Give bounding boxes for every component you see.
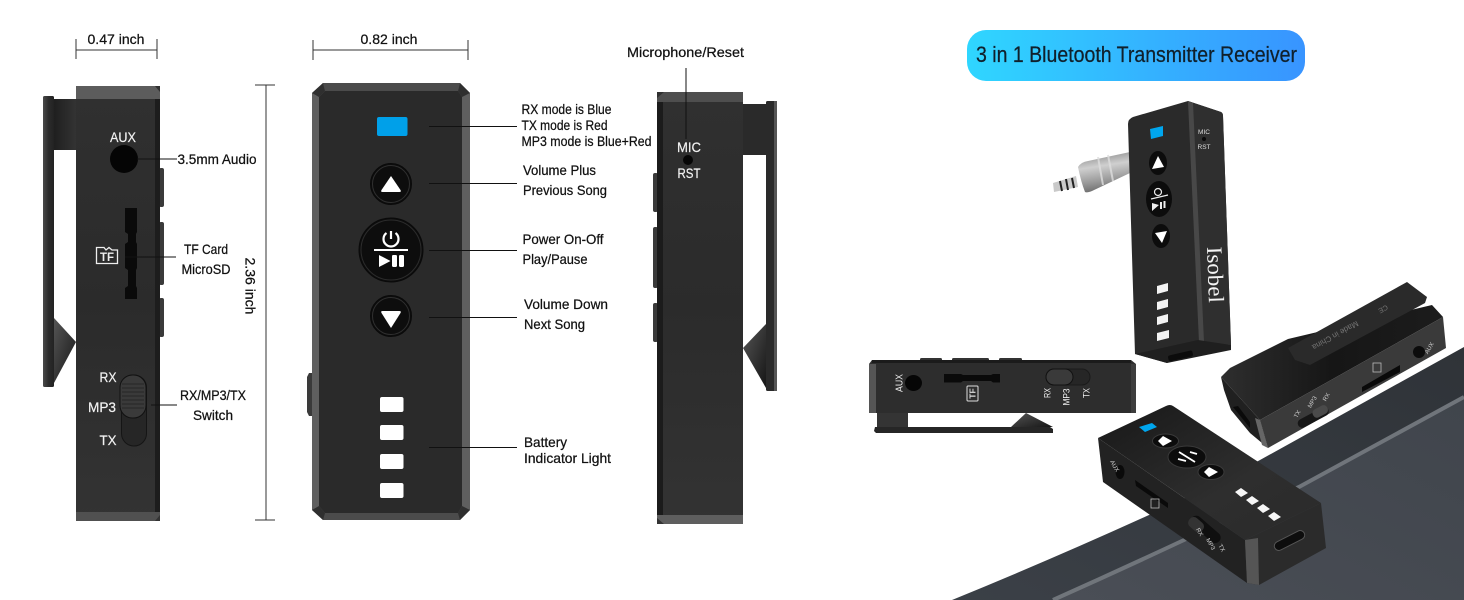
side ports: MP3 xyxy=(1204,538,1216,552)
power and play/pause button xyxy=(359,218,423,282)
title pill xyxy=(967,30,1305,81)
side buttons xyxy=(653,173,658,342)
TF slot: TF xyxy=(968,388,978,399)
callout: volume plus: Volume Plus xyxy=(523,162,596,178)
battery lights xyxy=(1235,488,1281,521)
ports and switch: AUX xyxy=(1424,342,1436,355)
device body xyxy=(76,86,160,521)
callout: power: Play/Pause xyxy=(522,251,588,267)
callout: volume down: Next Song xyxy=(524,316,585,332)
belt clip xyxy=(1288,282,1427,365)
callout: LED modes: TX mode is Red xyxy=(522,117,608,133)
front face xyxy=(1245,503,1326,585)
AUX port: AUX xyxy=(110,129,137,145)
AUX port xyxy=(894,374,922,392)
device body xyxy=(312,83,470,520)
side ports: TX xyxy=(1216,544,1225,553)
callout: microphone/reset xyxy=(627,44,744,139)
top face xyxy=(1098,405,1321,540)
callout: power xyxy=(429,231,604,267)
MIC mark: RST xyxy=(1198,144,1211,151)
mode switch: MP3 xyxy=(88,399,116,415)
callout: microphone/reset: Microphone/Reset xyxy=(627,44,744,60)
dimension: 0.47 inch: 0.47 inch xyxy=(88,31,144,47)
brand name: Isobel xyxy=(1202,246,1229,303)
callout: TF card MicroSD xyxy=(125,241,230,277)
device shell xyxy=(1128,101,1231,363)
mode switch: TX xyxy=(100,432,117,448)
side switch bump xyxy=(307,373,312,416)
dimension: 0.47 inch xyxy=(76,31,157,59)
MIC and reset hole xyxy=(677,139,701,181)
callout: 3.5mm audio: 3.5mm Audio xyxy=(178,151,257,167)
product photo: angled top view on table xyxy=(1098,405,1326,585)
callout: LED modes xyxy=(429,101,652,149)
callout: battery indicator xyxy=(429,434,611,466)
body xyxy=(869,360,1136,413)
blue mode LED xyxy=(377,117,408,136)
callout: volume plus: Previous Song xyxy=(523,182,607,198)
ports and switch xyxy=(1294,342,1436,429)
mode switch xyxy=(88,369,146,448)
clip arm xyxy=(743,101,777,391)
belt clip: Made in China xyxy=(1310,319,1360,352)
title pill: 3 in 1 Bluetooth Transmitter Receiver xyxy=(976,42,1297,67)
product photo: back view with clip xyxy=(1221,282,1446,448)
device body xyxy=(657,92,743,524)
ports and switch: TX xyxy=(1294,410,1303,419)
battery indicator lights xyxy=(380,397,404,498)
TF card slot xyxy=(125,208,137,299)
blue LED xyxy=(1139,423,1157,432)
side buttons xyxy=(159,168,164,337)
clip arm xyxy=(43,96,76,387)
callout: volume down xyxy=(429,296,608,332)
callout: TF card MicroSD: TF Card xyxy=(184,241,228,257)
switch xyxy=(1042,369,1092,406)
callout: TF card MicroSD: MicroSD xyxy=(182,261,230,277)
MIC mark xyxy=(1198,129,1211,151)
callout: power: Power On-Off xyxy=(522,231,604,247)
AUX port: AUX xyxy=(894,374,906,392)
ports and switch: RX xyxy=(1322,392,1332,403)
side ports: AUX xyxy=(1108,460,1120,473)
clip xyxy=(874,413,1053,433)
icon: TF card: TF xyxy=(100,250,114,264)
callout: RX/MP3/TX switch xyxy=(151,387,247,423)
dark curved table surface xyxy=(952,347,1464,600)
left side face xyxy=(1098,438,1247,583)
mode switch: RX xyxy=(100,369,117,385)
body xyxy=(1221,305,1446,448)
callout: volume plus xyxy=(429,162,607,198)
panel: side view with microphone xyxy=(653,92,777,524)
callout: 3.5mm audio xyxy=(137,151,257,167)
product photo: horizontal side view xyxy=(869,358,1136,433)
ports and switch: MP3 xyxy=(1307,395,1319,409)
MIC and reset hole: RST xyxy=(678,165,701,181)
volume down button xyxy=(370,296,412,336)
side ports xyxy=(1108,460,1225,553)
callout: LED modes: RX mode is Blue xyxy=(522,101,612,117)
dimension: 0.82 inch xyxy=(313,31,468,60)
belt clip: CE xyxy=(1376,303,1389,314)
panel: side view with audio and switch xyxy=(43,86,164,521)
audio plug xyxy=(1053,152,1130,192)
side ports: RX xyxy=(1194,527,1204,538)
switch: RX xyxy=(1042,388,1054,398)
buttons xyxy=(1146,151,1172,248)
switch: TX xyxy=(1082,387,1092,398)
panel: front view with buttons xyxy=(307,83,470,520)
icon: TF card xyxy=(96,248,118,264)
dimension: 2.36 inch xyxy=(242,85,275,520)
battery lights xyxy=(1157,283,1169,341)
callout: volume down: Volume Down xyxy=(524,296,608,312)
AUX port xyxy=(110,129,138,173)
top buttons xyxy=(920,358,1022,362)
TF slot xyxy=(944,374,1000,401)
callout: RX/MP3/TX switch: RX/MP3/TX xyxy=(180,387,247,403)
product photo: upright with audio plug xyxy=(1053,101,1231,363)
MIC mark: MIC xyxy=(1198,129,1210,136)
dimension: 2.36 inch: 2.36 inch xyxy=(242,258,258,314)
callout: RX/MP3/TX switch: Switch xyxy=(193,407,233,423)
callout: battery indicator: Indicator Light xyxy=(524,450,611,466)
volume up button xyxy=(370,164,412,204)
buttons xyxy=(1152,434,1224,480)
switch: MP3 xyxy=(1062,388,1072,406)
callout: battery indicator: Battery xyxy=(524,434,567,450)
callout: LED modes: MP3 mode is Blue+Red xyxy=(522,133,652,149)
dimension: 0.82 inch: 0.82 inch xyxy=(360,31,418,47)
blue LED xyxy=(1150,126,1163,139)
MIC and reset hole: MIC xyxy=(677,139,701,155)
